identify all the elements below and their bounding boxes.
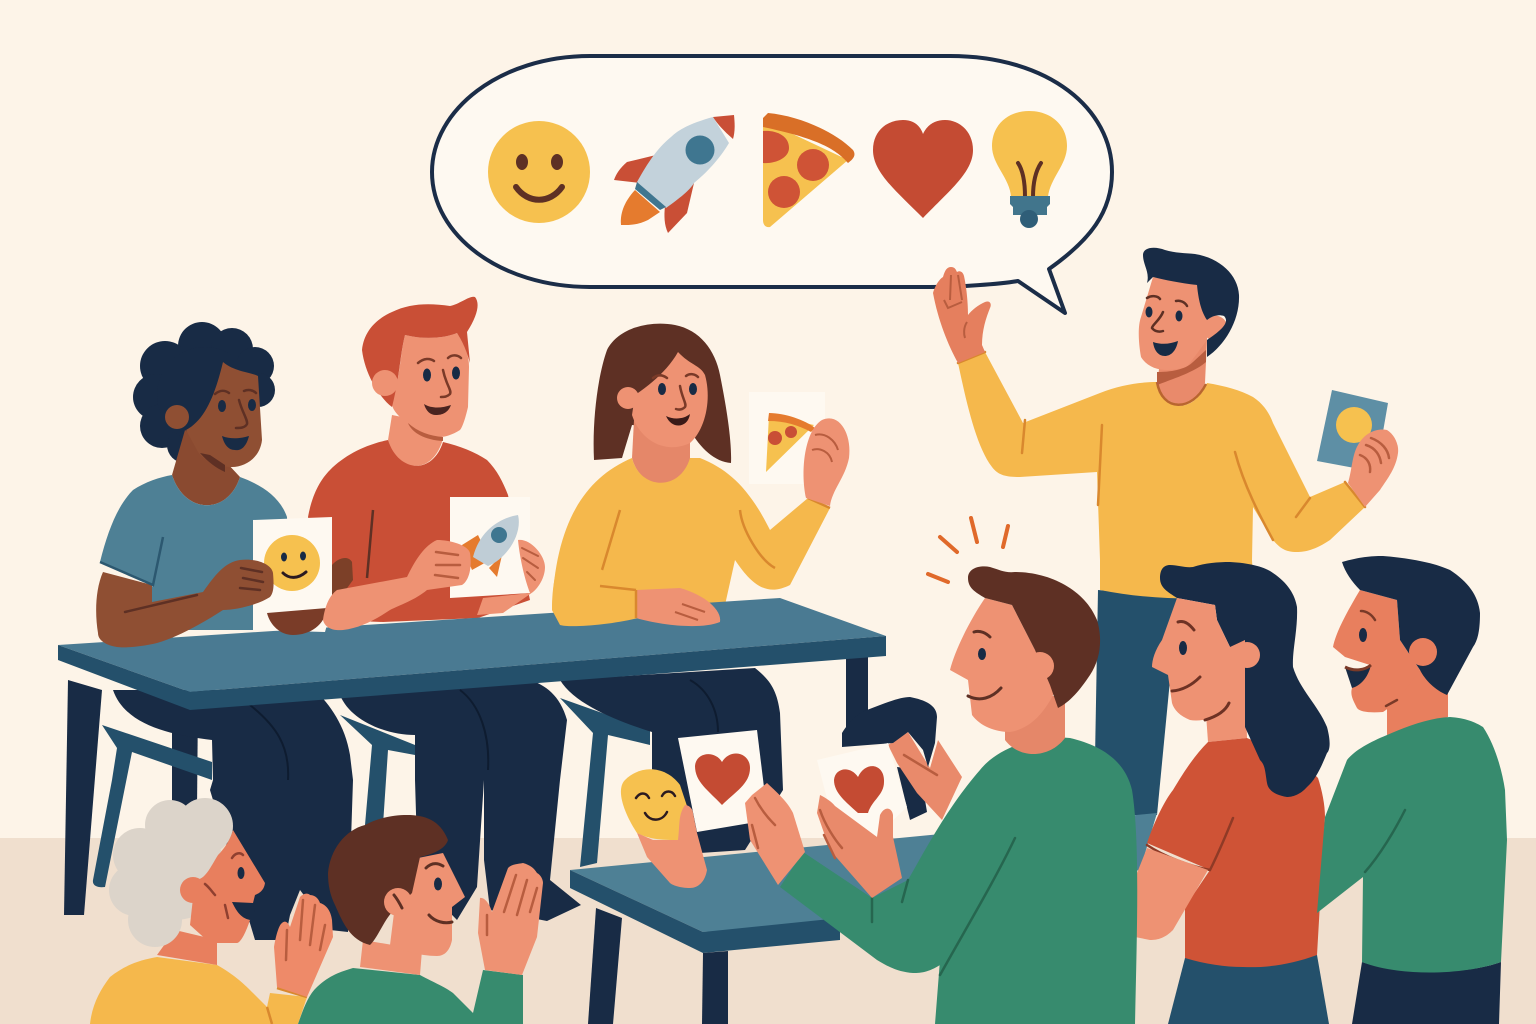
card: heart front: [678, 730, 768, 832]
face: [186, 362, 262, 467]
face: [1152, 598, 1245, 721]
person: boy foreground: [298, 815, 543, 1024]
heart card: [817, 743, 907, 837]
icon: smiley: [488, 121, 590, 223]
host sweater: [958, 352, 1365, 598]
blue t-shirt: [100, 475, 290, 630]
face: [632, 352, 708, 447]
person: foreground far right man: [1317, 556, 1507, 1024]
hidden figure behind heart card: [842, 697, 962, 820]
grey hair: [109, 798, 233, 947]
host card: [1317, 390, 1388, 472]
person: grandmother foreground: [90, 798, 333, 1024]
hand left: [745, 783, 805, 885]
hand behind card: [332, 558, 353, 598]
face: [190, 830, 265, 943]
card: smiley with hands: [253, 517, 353, 635]
table left legs: [64, 650, 868, 915]
face: [390, 853, 465, 956]
pizza card: [749, 392, 825, 484]
icon: pizza slice: [763, 113, 854, 227]
host hair: [1143, 248, 1239, 357]
floor: [0, 838, 1536, 1024]
speech bubble: [432, 56, 1112, 313]
host trousers: [1094, 590, 1178, 815]
forearm and hand left: [477, 540, 545, 615]
neck: [632, 420, 690, 484]
icon: heart: [873, 120, 973, 218]
grandmother hand: [274, 894, 333, 997]
neck: [1387, 670, 1448, 735]
brown hair: [968, 566, 1100, 708]
host right hand: [1348, 430, 1398, 507]
arm: [1135, 848, 1208, 940]
neck: [1005, 695, 1065, 754]
face: [1333, 590, 1420, 712]
neck: [360, 940, 422, 975]
green sweater: [1317, 717, 1507, 973]
skirt: [1168, 955, 1329, 1024]
yellow sweater: [552, 458, 830, 625]
person: seated curly hair: [100, 322, 290, 630]
neck: [1205, 670, 1247, 742]
trousers: [1352, 962, 1501, 1024]
neck: [172, 430, 240, 505]
card: rocket with hands: [323, 497, 545, 630]
hair: [1342, 556, 1480, 695]
legs of seated red-haired man: [340, 680, 581, 921]
green sweater: [298, 968, 523, 1024]
red hair: [362, 297, 478, 407]
brown bowl hand: [267, 608, 327, 635]
forearm and hand right: [323, 540, 471, 630]
green sweater and arm: [780, 737, 1137, 1024]
wavy hair: [1160, 562, 1330, 797]
boy hand: [478, 863, 543, 975]
hand with smiley card: [621, 769, 707, 888]
person: seated woman torso and head: [552, 324, 849, 625]
person: seated red hair: [308, 297, 530, 622]
person: standing host: [933, 248, 1398, 815]
curly hair: [133, 322, 275, 463]
seated woman arm resting on table: [552, 548, 720, 626]
neck: [388, 415, 442, 466]
hair: [594, 324, 731, 463]
face: [392, 333, 469, 437]
host face: [1139, 277, 1207, 370]
icon: rocket: [614, 115, 735, 233]
host raised hand: [933, 267, 991, 363]
brown hair: [328, 815, 448, 945]
neck: [157, 930, 217, 965]
chairs: [93, 698, 650, 887]
spark lines: [928, 518, 1008, 582]
red shirt: [1147, 738, 1325, 967]
legs of seated woman: [560, 668, 783, 853]
table top left: [58, 598, 886, 710]
host neck: [1157, 340, 1207, 404]
icon: light bulb: [992, 111, 1067, 228]
hand with card: [804, 418, 849, 506]
hand right: [817, 795, 902, 898]
small table right: [570, 813, 1157, 1024]
face: [950, 598, 1060, 732]
person: foreground woman wavy hair: [1135, 562, 1330, 1024]
legs of seated curly-haired man: [113, 690, 353, 940]
person: foreground man brown hair: [745, 518, 1137, 1024]
arm of curly-haired man: [96, 537, 274, 647]
red shirt: [308, 440, 530, 622]
yellow cardigan: [90, 957, 307, 1024]
